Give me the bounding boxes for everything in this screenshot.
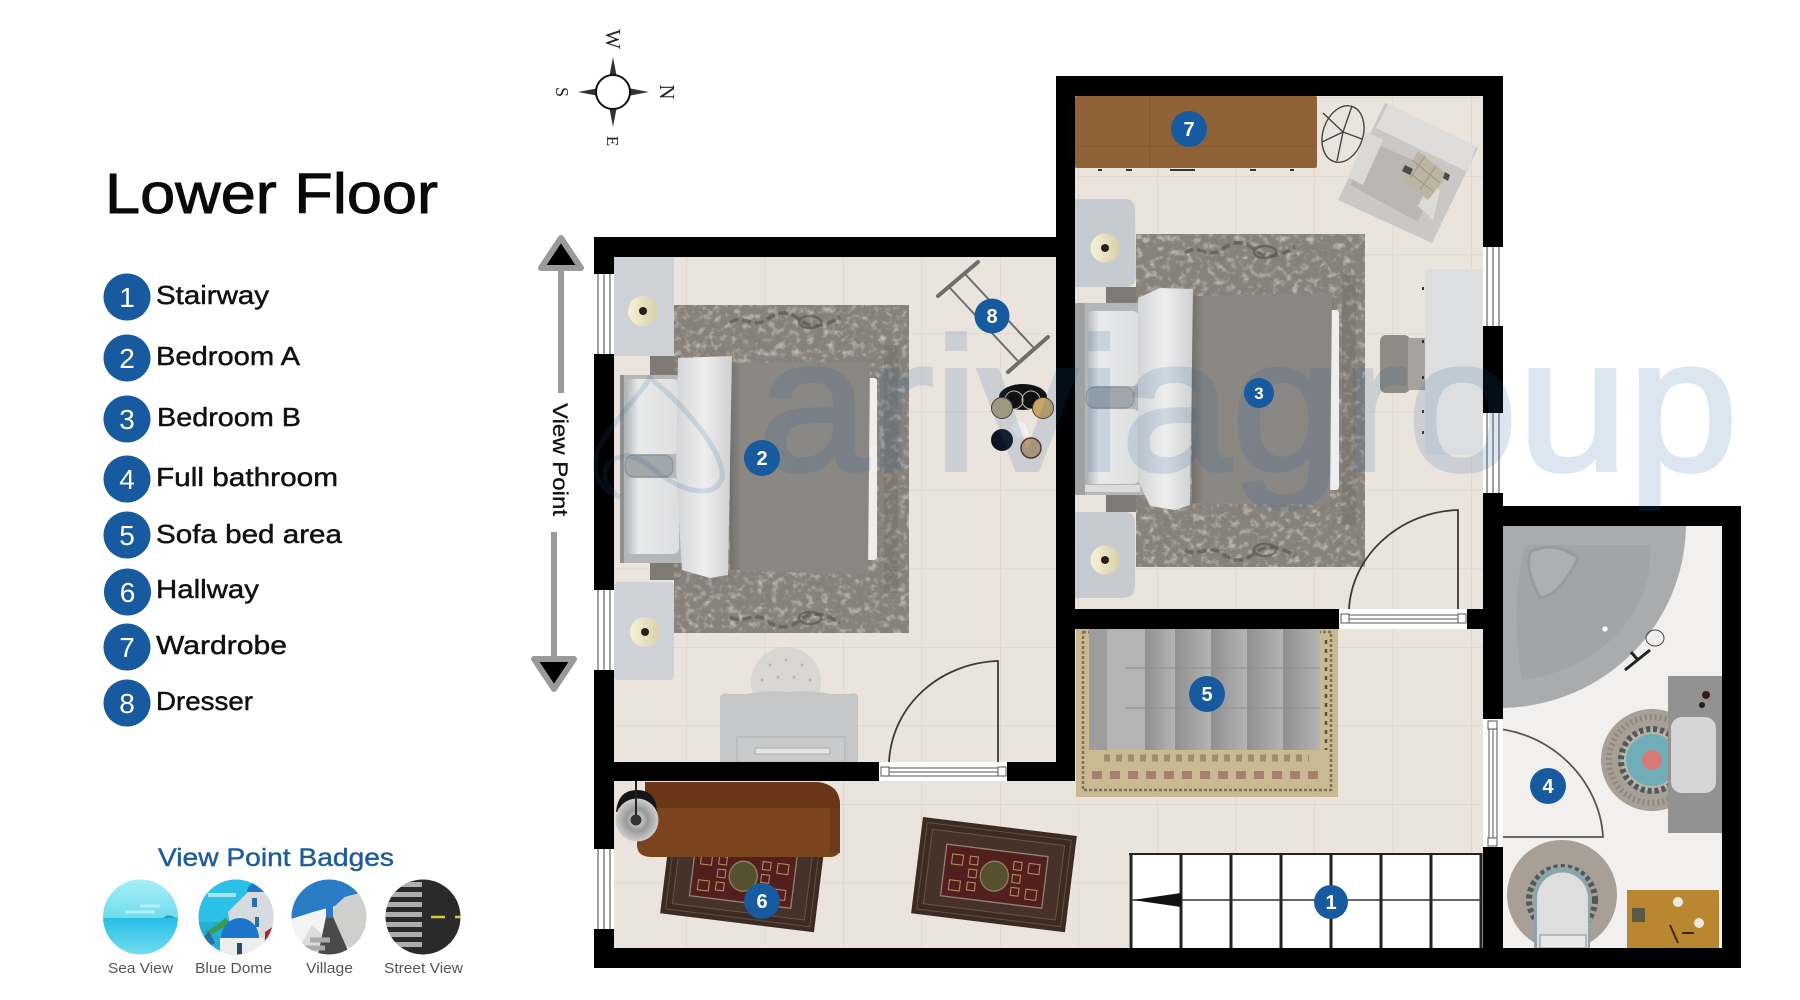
compass south label: S <box>552 87 572 97</box>
room: bathroom fixtures <box>1488 526 1722 950</box>
legend item 7: 7 <box>119 632 135 663</box>
marker 5 <box>1189 676 1225 712</box>
door swing: bedroom B <box>1349 510 1458 609</box>
nightstand with lamp: bottom <box>1075 512 1135 598</box>
legend item 4: Full bathroom <box>156 462 338 492</box>
badge: sea view: Sea View <box>108 960 173 977</box>
room: Bedroom A furniture <box>614 257 1054 762</box>
rug: sofa bed <box>1076 629 1338 797</box>
dresser items <box>991 384 1054 458</box>
legend item 6: 6 <box>120 577 135 608</box>
legend list <box>104 274 343 726</box>
door swing: bedroom A <box>889 661 998 762</box>
marker 2 <box>744 440 780 476</box>
nightstand with lamp: top <box>614 257 674 356</box>
legend item 5 <box>104 512 343 558</box>
legend item 5: 5 <box>119 520 135 551</box>
compass ring <box>596 75 630 109</box>
badge: village: Village <box>306 960 353 977</box>
wardrobe <box>1075 96 1317 170</box>
bathtub <box>1503 526 1686 708</box>
legend item 3: Bedroom B <box>157 402 301 432</box>
stairway <box>1129 853 1482 948</box>
marker 1: 1 <box>1325 892 1337 914</box>
badge: blue dome: Blue Dome <box>195 960 272 977</box>
vanity table with stool <box>720 647 858 762</box>
legend item 7 <box>104 624 287 670</box>
room: Bedroom B furniture <box>1075 96 1483 609</box>
nightstand with lamp: top <box>1075 199 1136 287</box>
watermark: ariviagroup <box>758 300 1738 511</box>
round rug and toilet <box>1507 840 1617 950</box>
vanity and sink <box>1668 676 1722 833</box>
legend item 4 <box>104 456 338 502</box>
view point arrows <box>534 238 581 689</box>
rug: bedroom B <box>1106 234 1365 567</box>
legend item 3: 3 <box>119 404 135 435</box>
map markers <box>744 111 1566 919</box>
desk with chair <box>1380 269 1483 455</box>
legend item 2: Bedroom A <box>156 341 301 371</box>
floor: tiled rooms <box>614 96 1483 948</box>
floor: bathroom marble <box>1503 526 1722 948</box>
rug: hallway left <box>660 817 826 932</box>
sofa <box>637 782 840 857</box>
round rug: sink <box>1601 709 1703 811</box>
legend item 8: Dresser <box>156 686 253 716</box>
sofa bed <box>1089 629 1320 750</box>
legend item 6: Hallway <box>156 574 259 604</box>
legend item 1: 1 <box>119 282 135 313</box>
marker 3: 3 <box>1254 384 1264 403</box>
wood mat <box>1627 890 1719 948</box>
bed B <box>1075 288 1339 510</box>
view point badges <box>103 879 463 977</box>
marker 6 <box>744 883 780 919</box>
marker 7 <box>1171 111 1207 147</box>
legend item 3 <box>104 396 301 442</box>
legend item 2: 2 <box>119 343 135 374</box>
walls <box>594 76 1741 968</box>
compass east label: E <box>603 136 622 146</box>
marker 4: 4 <box>1542 776 1554 798</box>
bed A <box>620 356 877 578</box>
dresser rack <box>938 262 1048 372</box>
door frames <box>879 609 1503 847</box>
legend item 1: Stairway <box>156 280 269 310</box>
rug: hallway right <box>911 817 1077 932</box>
marker 5: 5 <box>1201 684 1213 706</box>
arrow: up <box>541 238 581 393</box>
arrow: down <box>534 532 574 689</box>
marker 1 <box>1314 885 1348 919</box>
legend item 5: Sofa bed area <box>156 519 343 549</box>
floor lamp <box>616 781 658 842</box>
legend item 4: 4 <box>119 464 135 495</box>
marker 3 <box>1244 378 1274 408</box>
compass north label: N <box>655 84 679 100</box>
windows <box>598 247 1499 929</box>
legend item 2 <box>104 334 301 382</box>
stair direction arrow <box>1133 893 1181 907</box>
compass <box>552 29 679 146</box>
view point label: View Point <box>548 403 571 516</box>
marker 8 <box>974 298 1010 334</box>
marker 8: 8 <box>986 306 998 328</box>
marker 2: 2 <box>756 448 768 470</box>
marker 4 <box>1530 768 1566 804</box>
legend item 8 <box>104 680 253 726</box>
rug: bedroom A <box>650 305 909 633</box>
door swing: bathroom <box>1488 728 1603 837</box>
badge: street view: Street View <box>384 960 463 977</box>
room: hallway furniture <box>616 781 1077 932</box>
marker 7: 7 <box>1183 119 1195 141</box>
badge: sea view <box>103 879 178 977</box>
legend item 1 <box>104 274 269 320</box>
armchair <box>1338 103 1478 243</box>
view point badges heading: View Point Badges <box>158 844 394 872</box>
badge: village <box>291 879 367 977</box>
round fan chair frame <box>1315 100 1371 168</box>
compass needles <box>578 57 649 127</box>
badge: blue dome <box>195 879 274 977</box>
legend item 6 <box>104 568 259 616</box>
room: sofa bed area <box>1076 629 1338 797</box>
badge: street view <box>384 879 463 977</box>
compass west label: W <box>601 29 625 49</box>
floor plan <box>594 76 1741 968</box>
legend item 8: 8 <box>119 688 135 719</box>
nightstand with lamp: bottom <box>614 582 674 680</box>
title: Lower Floor <box>105 162 438 226</box>
legend item 7: Wardrobe <box>156 630 287 660</box>
marker 6: 6 <box>756 891 768 913</box>
